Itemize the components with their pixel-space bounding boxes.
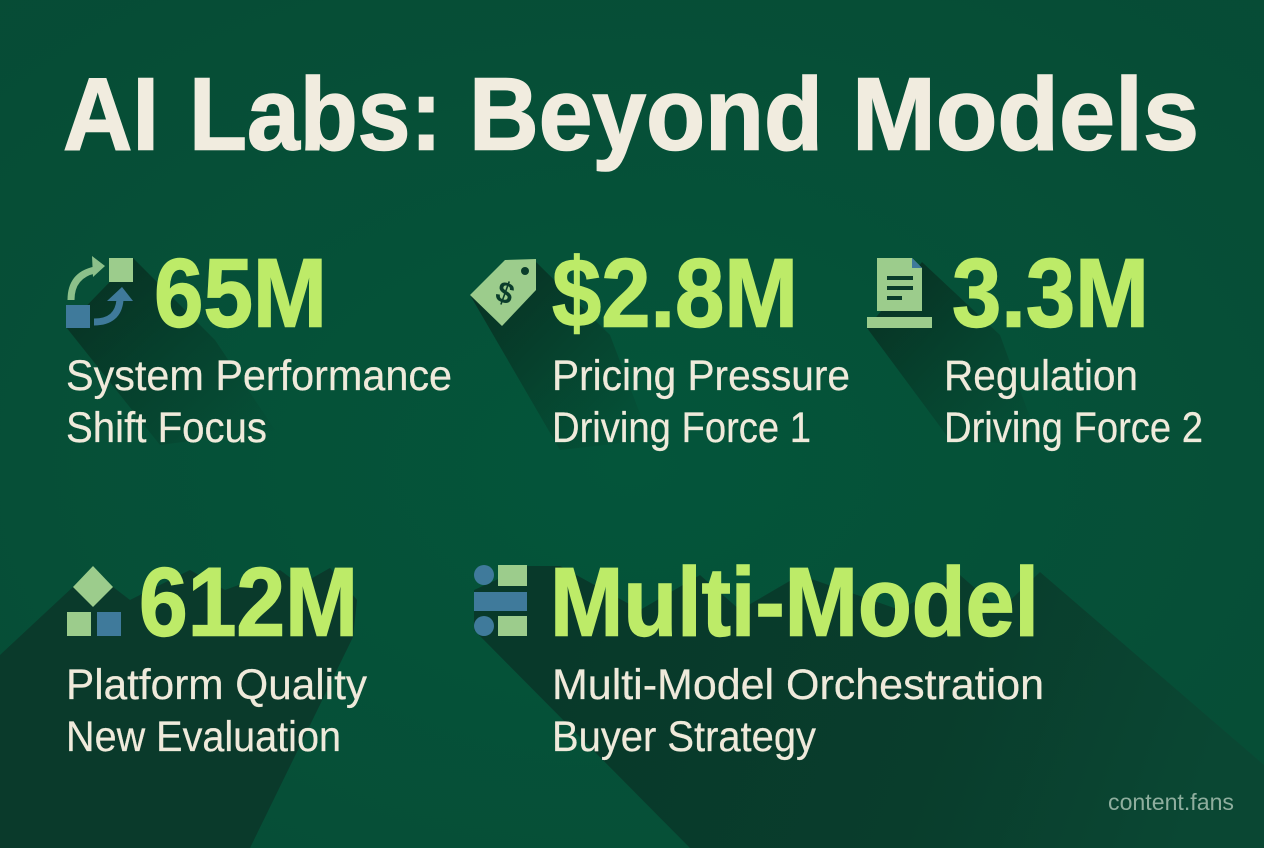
value: 612M: 612M <box>139 548 358 656</box>
stat: platform quality <box>66 548 367 761</box>
watermark: content.fans <box>1108 789 1234 815</box>
stat: pricing pressure <box>470 238 850 452</box>
title: Labs: <box>189 56 442 172</box>
icon: price tag <box>470 259 536 326</box>
label: system performance: System Performance <box>66 352 452 400</box>
label: regulation: Regulation <box>944 352 1138 400</box>
icon: document <box>867 258 932 328</box>
icon: orchestration blocks <box>474 565 527 636</box>
label: multi-model orchestration: Multi-Model Orchestration <box>552 661 1044 709</box>
title: Beyond <box>469 56 823 172</box>
label: shift focus: Shift Focus <box>66 404 267 452</box>
value: 65M: 65M <box>154 238 327 348</box>
icon: cycle arrows <box>66 256 133 328</box>
icon: price tag: $ <box>491 275 519 312</box>
title: AI <box>63 56 159 172</box>
title: Models <box>852 56 1199 172</box>
label: driving force 1: Driving Force 1 <box>552 404 811 452</box>
value: 3.3M: 3.3M <box>952 238 1149 348</box>
stat: system performance <box>66 238 452 452</box>
long shadows <box>0 258 1264 848</box>
label: driving force 2: Driving Force 2 <box>944 404 1203 452</box>
stat: multi-model <box>474 548 1044 761</box>
icon: diamond and squares <box>67 566 121 636</box>
title <box>63 56 1199 172</box>
label: platform quality: Platform Quality <box>66 661 367 709</box>
stat: regulation <box>867 238 1203 452</box>
value: $2.8M: $2.8M <box>552 238 798 348</box>
label: buyer strategy: Buyer Strategy <box>552 713 816 761</box>
label: pricing pressure: Pricing Pressure <box>552 352 850 400</box>
label: new evaluation: New Evaluation <box>66 713 341 761</box>
value: Multi-Model: Multi-Model <box>550 548 1039 656</box>
